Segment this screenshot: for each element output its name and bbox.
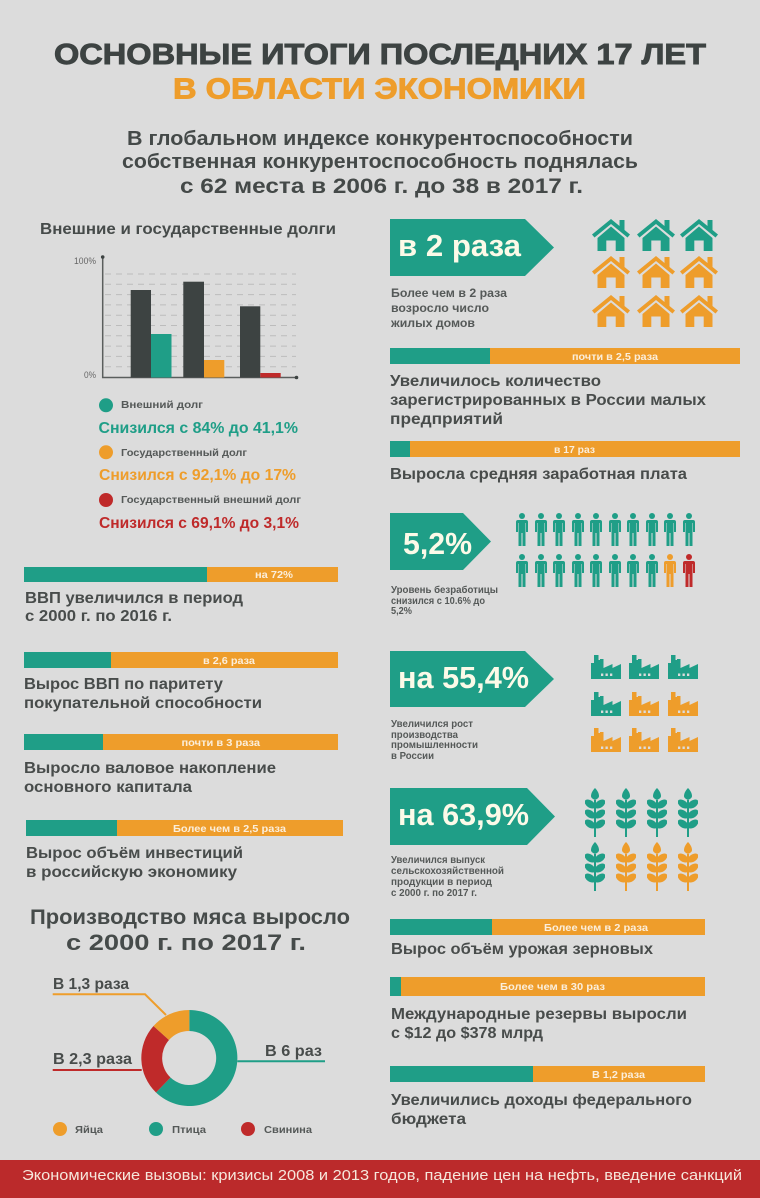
callout: housing: жилых домов (390, 318, 475, 330)
stat: grain (390, 919, 705, 958)
donut chart: meat: В 2,3 раза (53, 1051, 132, 1068)
bar chart: debts: 100% (74, 256, 96, 266)
callout: housing: в 2 раза (398, 228, 522, 263)
title: ОСНОВНЫЕ ИТОГИ ПОСЛЕДНИХ 17 ЛЕТ (54, 39, 707, 71)
stat: grain: Более чем в 2 раза (544, 923, 648, 934)
stat: capital: Выросло валовое накопление (24, 760, 276, 777)
heading: meat production (30, 906, 350, 955)
stat: GDP: с 2000 г. по 2016 г. (25, 608, 172, 625)
stat: reserves: Более чем в 30 раз (500, 982, 605, 993)
callout: housing (390, 219, 554, 330)
callout: unemployment: снизился с 10.6% до (391, 596, 485, 607)
title: В ОБЛАСТИ ЭКОНОМИКИ (173, 74, 586, 106)
stat: investments: в российскую экономику (26, 864, 237, 881)
legend: debts: Внешний долг (121, 400, 203, 411)
subtitle: собственная конкурентоспособность поднялась (122, 151, 638, 173)
heading: debts: Внешние и государственные долги (40, 221, 336, 238)
callout: agriculture: с 2000 г. по 2017 г. (391, 888, 477, 899)
stat: salary: в 17 раз (554, 445, 595, 456)
stat: GDP PPP: покупательной способности (24, 695, 262, 712)
legend: debts: Государственный внешний долг (121, 495, 301, 506)
legend: meat: Птица (172, 1125, 206, 1136)
callout: industry: в России (391, 751, 434, 762)
donut chart: meat (53, 976, 325, 1106)
stat: investments: Вырос объём инвестиций (26, 845, 243, 862)
heading: meat production: с 2000 г. по 2017 г. (66, 930, 306, 955)
callout: housing: Более чем в 2 раза (391, 288, 508, 300)
subtitle (122, 128, 638, 198)
stat: budget: Увеличились доходы федерального (391, 1092, 692, 1109)
stat: GDP: ВВП увеличился в период (25, 590, 243, 607)
stat: capital: почти в 3 раза (182, 738, 260, 749)
legend: debts: Снизился с 69,1% до 3,1% (99, 515, 299, 532)
title (54, 39, 707, 106)
icon grid: houses (592, 219, 718, 327)
stat: budget: В 1,2 раза (592, 1070, 645, 1081)
stat: GDP PPP: в 2,6 раза (203, 656, 255, 667)
legend: debts: Снизился с 92,1% до 17% (99, 467, 296, 484)
stat: reserves (390, 977, 705, 1042)
stat: capital: основного капитала (24, 779, 192, 796)
stat: grain: Вырос объём урожая зерновых (391, 941, 653, 958)
legend: debts: Государственный долг (121, 448, 247, 459)
callout: unemployment: Уровень безработицы (391, 584, 498, 596)
callout: agriculture (390, 788, 555, 899)
footer banner (0, 1160, 760, 1198)
stat: reserves: Международные резервы выросли (391, 1006, 687, 1023)
callout: agriculture: сельскохозяйственной (391, 866, 504, 877)
stat: small businesses (390, 348, 740, 428)
bar chart: debts: 0% (84, 370, 96, 380)
stat: small businesses: зарегистрированных в России малых (390, 392, 706, 409)
donut chart: meat: В 6 раз (265, 1043, 322, 1060)
callout: unemployment: 5,2% (391, 606, 412, 617)
stat: GDP PPP (24, 652, 338, 712)
legend: meat: Свинина (264, 1125, 312, 1136)
stat: salary (390, 441, 740, 483)
callout: agriculture: на 63,9% (398, 797, 529, 832)
stat: capital (24, 734, 338, 796)
stat: GDP (24, 567, 338, 625)
footer banner: Экономические вызовы: кризисы 2008 и 2013 годов, падение цен на нефть, введение санкций (22, 1167, 742, 1184)
stat: small businesses: почти в 2,5 раза (572, 352, 658, 363)
callout: industry: Увеличился рост (391, 719, 473, 730)
callout: unemployment (390, 513, 498, 617)
stat: GDP: на 72% (255, 570, 293, 581)
icon grid: factories (591, 655, 698, 752)
stat: investments (26, 820, 343, 881)
stat: budget: бюджета (391, 1111, 466, 1128)
callout: agriculture: продукции в период (391, 877, 493, 888)
subtitle: В глобальном индексе конкурентоспособности (127, 128, 633, 150)
legend: debts: Снизился с 84% до 41,1% (98, 420, 298, 437)
subtitle: с 62 места в 2006 г. до 38 в 2017 г. (180, 174, 583, 198)
callout: unemployment: 5,2% (403, 526, 472, 561)
stat: salary: Выросла средняя заработная плата (390, 466, 687, 483)
icon grid: wheat (583, 788, 700, 891)
icon grid: people (516, 513, 695, 587)
callout: housing: возросло число (391, 303, 489, 315)
callout: industry (390, 651, 554, 762)
legend: meat: Яйца (75, 1125, 103, 1136)
legend: meat (53, 1122, 312, 1136)
stat: GDP PPP: Вырос ВВП по паритету (24, 676, 223, 693)
callout: industry: на 55,4% (398, 660, 529, 695)
donut chart: meat: В 1,3 раза (53, 976, 129, 993)
legend: debts (98, 398, 301, 532)
stat: reserves: с $12 до $378 млрд (391, 1025, 543, 1042)
bar chart: debts (74, 255, 298, 380)
heading: meat production: Производство мяса выросло (30, 906, 350, 929)
callout: industry: производства (391, 730, 458, 741)
stat: small businesses: Увеличилось количество (390, 373, 601, 390)
callout: industry: промышленности (391, 740, 478, 751)
callout: agriculture: Увеличился выпуск (391, 855, 486, 866)
stat: budget (390, 1066, 705, 1128)
stat: small businesses: предприятий (390, 411, 503, 428)
stat: investments: Более чем в 2,5 раза (173, 824, 286, 835)
